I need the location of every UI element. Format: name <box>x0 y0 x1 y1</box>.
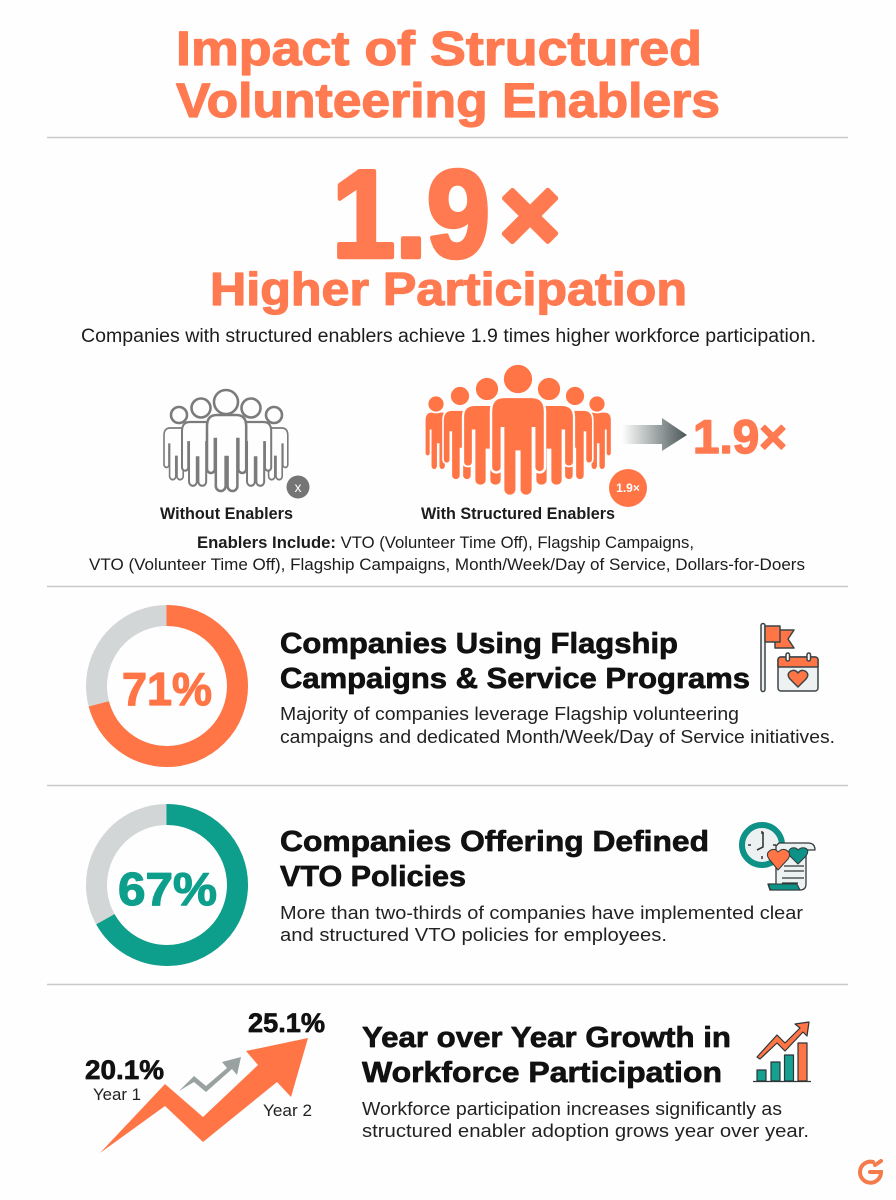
arrow: growth <box>100 1038 308 1153</box>
description: Workforce participation increases significantly as <box>362 1099 782 1119</box>
label: year 1: Year 1 <box>93 1085 141 1104</box>
multiplier: 1.9× <box>693 410 787 463</box>
panel: flagship campaigns <box>96 616 835 756</box>
heading: Campaigns & Service Programs <box>280 663 750 695</box>
label: without enablers: Without Enablers <box>160 505 293 523</box>
heading <box>280 628 750 695</box>
description: and structured VTO policies for employees. <box>280 924 667 945</box>
description: structured enabler adoption grows year over year. <box>362 1121 809 1141</box>
badge: 1.9x: 1.9× <box>616 481 640 495</box>
donut value: 67% <box>118 863 217 915</box>
enablers text: Enablers Include: VTO (Volunteer Time Off), Flagship Campaigns, <box>197 534 694 552</box>
value: year 1: 20.1% <box>85 1055 164 1085</box>
badge: x mark <box>286 476 310 498</box>
badge: x mark: x <box>294 479 302 495</box>
description <box>280 703 835 747</box>
label: with structured enablers: With Structured Enablers <box>421 505 615 523</box>
badge: 1.9x <box>609 469 647 507</box>
heading: VTO Policies <box>280 861 466 893</box>
description: Majority of companies leverage Flagship volunteering <box>280 703 739 724</box>
heading: Companies Using Flagship <box>280 628 678 660</box>
title: Volunteering Enablers <box>176 75 720 128</box>
enablers text: VTO (Volunteer Time Off), Flagship Campaigns, Month/Week/Day of Service, Dollars-for-Doers <box>89 556 805 574</box>
heading: Companies Offering Defined <box>280 826 709 858</box>
enablers text <box>89 534 805 574</box>
description: More than two-thirds of companies have implemented clear <box>280 902 803 923</box>
headline statistic: × <box>500 158 560 272</box>
donut chart: 67% <box>96 814 238 956</box>
panel: VTO policies <box>96 814 815 956</box>
icon: flag and calendar <box>761 624 818 692</box>
description <box>362 1099 809 1141</box>
arrow: gradient <box>622 418 687 451</box>
label: year 2: Year 2 <box>263 1101 312 1120</box>
icon: people without enablers <box>164 390 288 491</box>
title <box>176 23 720 128</box>
donut value: 71% <box>122 663 212 715</box>
headline subtitle: Higher Participation <box>210 263 687 315</box>
description <box>280 902 803 945</box>
heading: Workforce Participation <box>362 1057 722 1089</box>
headline description: Companies with structured enablers achieve 1.9 times higher workforce participation. <box>81 326 816 347</box>
logo <box>860 1161 881 1183</box>
title: Impact of Structured <box>176 23 702 76</box>
icon: people with enablers <box>425 364 611 496</box>
panel: year over year growth <box>85 1008 811 1153</box>
arrow: small gray <box>179 1057 241 1092</box>
icon: clock and policy scroll <box>742 825 815 890</box>
description: campaigns and dedicated Month/Week/Day of Service initiatives. <box>280 726 835 747</box>
icon: bar chart with arrow <box>753 1022 811 1082</box>
heading: Year over Year Growth in <box>362 1022 731 1054</box>
heading <box>362 1022 731 1089</box>
heading <box>280 826 709 893</box>
headline statistic: 1.9 <box>332 146 490 284</box>
value: year 2: 25.1% <box>248 1008 325 1038</box>
donut chart: 71% <box>96 616 238 756</box>
